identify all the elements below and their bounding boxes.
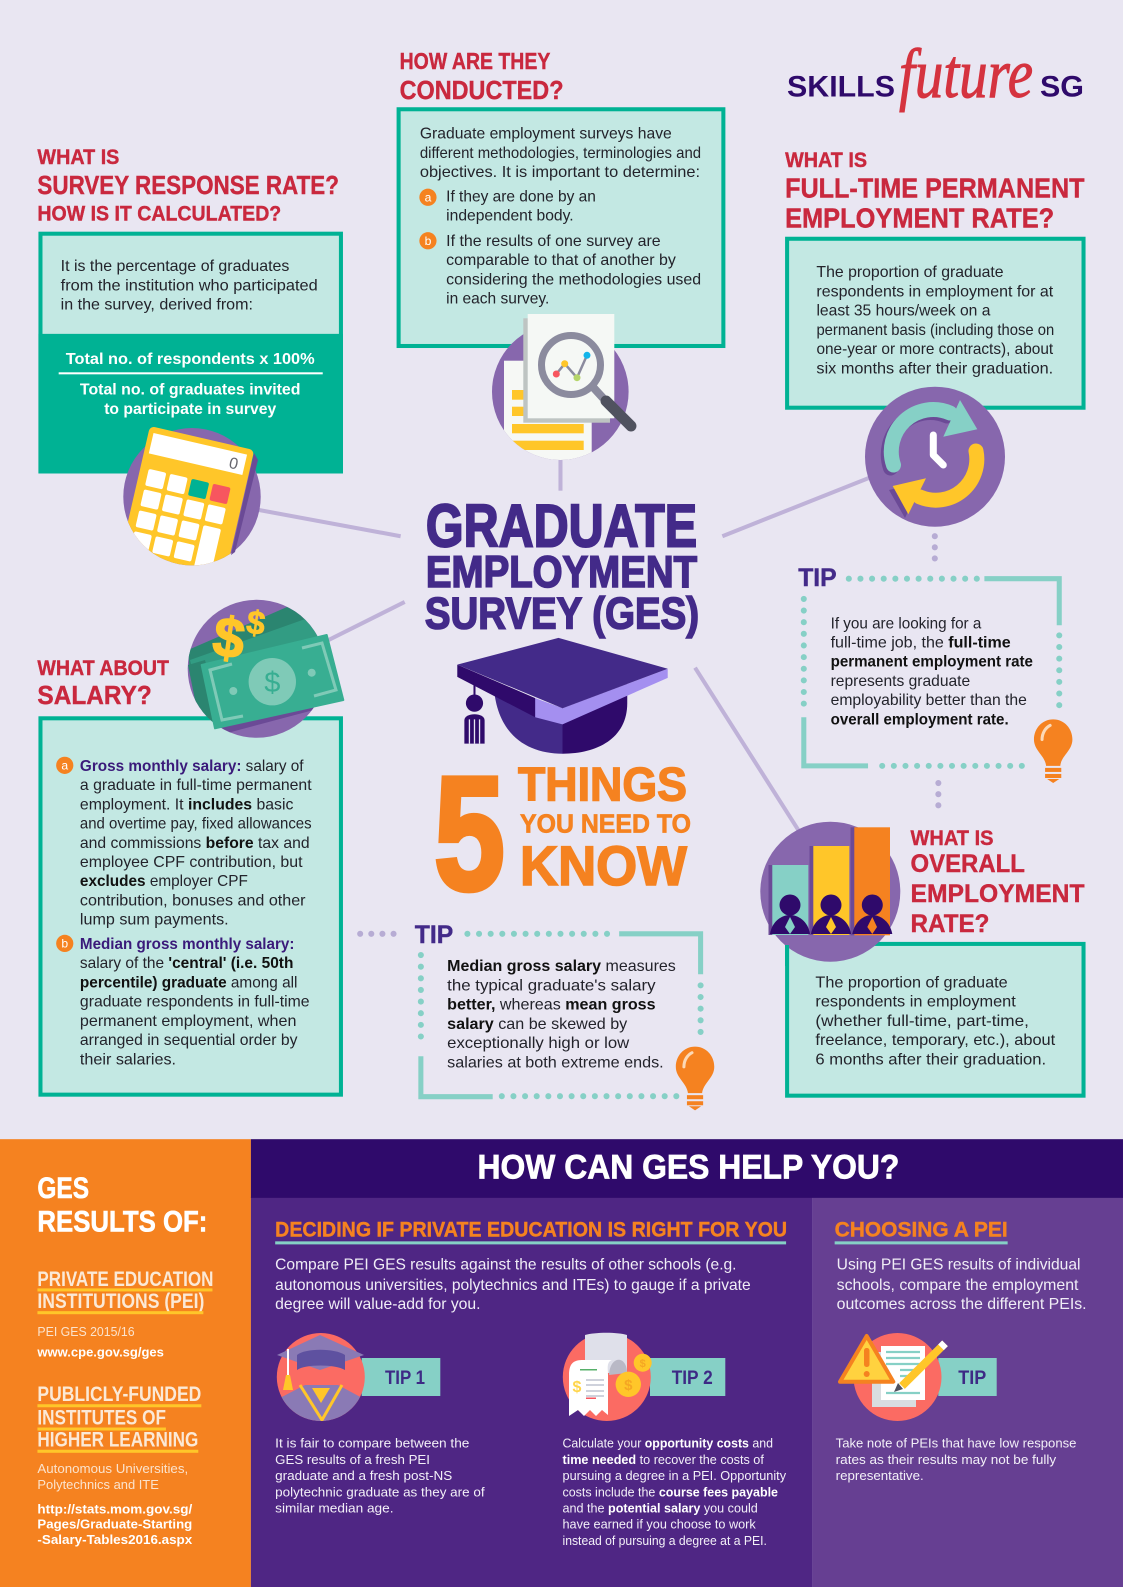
text: gross monthly salary: excludes employer CPF: [80, 873, 248, 890]
text: definition: [816, 264, 1054, 377]
text: gross monthly salary: a: [61, 758, 68, 772]
box background: [787, 944, 1084, 1096]
panel: tip on median salary: [360, 921, 714, 1110]
heading: overall employment rate: WHAT IS: [911, 826, 993, 850]
panel: tip on full-time job: [798, 536, 1072, 813]
publicly-funded institutes: Polytechnics and ITE: [37, 1477, 159, 1492]
tip text: employability better than the: [831, 692, 1027, 709]
private education institutions: www.cpe.gov.sg/ges: [36, 1345, 164, 1360]
private education institutions: PEI GES 2015/16: [37, 1324, 135, 1339]
text: definition: respondents in employment for at: [816, 283, 1054, 300]
text: gross monthly salary: a graduate in full-time permanent: [80, 777, 312, 794]
heading: how are they conducted: [400, 48, 564, 105]
box background: [787, 239, 1084, 408]
heading: GES results of: RESULTS OF:: [37, 1206, 207, 1239]
title: GRADUATE: [426, 491, 697, 559]
text: tip 2: time needed to recover the costs of: [563, 1452, 764, 1467]
text: gross monthly salary: and overtime pay, fixed allowances: [80, 816, 312, 833]
section: deciding if private education is right for you: degree will value-add for you.: [275, 1296, 481, 1313]
text: tip 2: [563, 1436, 786, 1548]
PEI tip badge with warning icon: [840, 1333, 997, 1421]
text: methodology: a: [425, 190, 432, 204]
tip text: full-time job, the full-time: [831, 634, 1011, 651]
section: deciding if private education is right for you: [275, 1217, 787, 1313]
icon: money: [188, 600, 343, 738]
panel: overall employment rate: [787, 826, 1085, 1096]
icon: calculator: 0: [227, 455, 240, 474]
5 things you need to know: THINGS: [518, 758, 687, 811]
text: definition: (whether full-time, part-time,: [815, 1013, 1029, 1030]
private education institutions: [36, 1267, 213, 1360]
text: tip 2: pursuing a degree in a PEI. Opportunity: [563, 1468, 786, 1483]
text: tip 1: [275, 1436, 485, 1515]
text: median gross monthly salary: graduate respondents in full-time: [80, 994, 310, 1011]
text: methodology: If the results of one survey are: [446, 233, 661, 250]
text: median gross monthly salary: salary of the 'central' (i.e. 50th: [80, 955, 293, 972]
text: PEI tip: [836, 1436, 1076, 1483]
text: methodology: considering the methodologies used: [446, 271, 701, 288]
text: tip 2: and the potential salary you could: [563, 1500, 758, 1515]
publicly-funded institutes: INSTITUTES OF: [37, 1405, 166, 1429]
formula: [59, 351, 323, 418]
tip 2 badge with receipt icon: $: [624, 1377, 633, 1394]
logo: SkillsFuture SG: [787, 36, 1084, 113]
title: SURVEY (GES): [425, 589, 699, 638]
text: gross monthly salary: Gross monthly salary: salary of: [80, 758, 304, 775]
tip text: better, whereas mean gross: [447, 997, 656, 1014]
green formula band: [38, 334, 343, 473]
text: methodology: independent body.: [446, 208, 574, 225]
section: deciding if private education is right for you: Compare PEI GES results against the results of other schools (e.g.: [275, 1257, 737, 1274]
text: median gross monthly salary: percentile) graduate among all: [80, 974, 297, 991]
text: tip 1: similar median age.: [275, 1500, 394, 1515]
heading: salary: [37, 656, 169, 710]
text: tip 1: GES results of a fresh PEI: [275, 1452, 430, 1467]
heading: GES results of: GES: [37, 1172, 89, 1205]
publicly-funded institutes: [37, 1382, 201, 1547]
text: definition: [815, 974, 1056, 1068]
text: methodology: b: [425, 234, 432, 248]
tip frame: [804, 579, 1059, 766]
text: definition: permanent basis (including those on: [816, 322, 1054, 339]
heading: how are they conducted: HOW ARE THEY: [400, 48, 551, 74]
tip label: TIP: [415, 921, 453, 949]
heading: full-time permanent: WHAT IS: [785, 148, 867, 172]
title: EMPLOYMENT: [426, 548, 697, 597]
icon: money: $: [209, 604, 249, 671]
panel: how are they conducted: [399, 48, 723, 346]
tip 1 badge with graduate icon: [276, 1333, 440, 1425]
logo: SkillsFuture SG: SKILLS: [787, 71, 895, 104]
tip 1 badge with graduate icon: TIP 1: [385, 1368, 425, 1389]
section: deciding if private education is right for you: DECIDING IF PRIVATE EDUCATION IS RIGHT FOR YOU: [275, 1217, 787, 1241]
text: methodology: in each survey.: [446, 291, 549, 308]
text: gross monthly salary: [56, 757, 312, 929]
tip 2 badge with receipt icon: [563, 1333, 725, 1421]
heading: salary: WHAT ABOUT: [37, 656, 169, 680]
text: definition: respondents in employment: [815, 994, 1016, 1011]
section: deciding if private education is right for you: autonomous universities, polytechnics and ITEs) to gauge if a private: [275, 1277, 751, 1294]
publicly-funded institutes: HIGHER LEARNING: [37, 1428, 198, 1452]
icon: graduation cap: [457, 638, 668, 754]
text: median gross monthly salary: [56, 935, 310, 1068]
publicly-funded institutes: -Salary-Tables2016.aspx: [37, 1532, 193, 1547]
heading: survey response rate: SURVEY RESPONSE RATE?: [37, 170, 339, 200]
tip text: represents graduate: [831, 673, 970, 690]
text: methodology: Graduate employment surveys have: [420, 126, 672, 143]
icon: money: $: [264, 667, 280, 699]
tip text: salary can be skewed by: [447, 1016, 627, 1033]
tip text: [831, 615, 1033, 728]
text: definition: least 35 hours/week on a: [816, 303, 991, 320]
icon: money: $: [244, 603, 268, 642]
publicly-funded institutes: Pages/Graduate-Starting: [37, 1517, 192, 1532]
text: methodology: comparable to that of another by: [446, 252, 676, 269]
connector lines: [253, 455, 875, 835]
heading: overall employment rate: [911, 826, 1085, 938]
heading: survey response rate: HOW IS IT CALCULATED?: [37, 202, 281, 226]
section: choosing a PEI: Using PEI GES results of individual: [837, 1257, 1080, 1274]
text: tip 2: have earned if you choose to work: [563, 1517, 756, 1532]
heading: how are they conducted: CONDUCTED?: [400, 75, 564, 105]
text: median gross monthly salary: Median gross monthly salary:: [80, 936, 294, 953]
text: definition: The proportion of graduate: [816, 264, 1004, 281]
section: choosing a PEI: outcomes across the different PEIs.: [837, 1296, 1087, 1313]
panel: salary: [37, 656, 341, 1095]
publicly-funded institutes: PUBLICLY-FUNDED: [37, 1382, 201, 1406]
text: PEI tip: rates as their results may not be fully: [836, 1452, 1057, 1467]
text: definition: six months after their graduation.: [816, 360, 1053, 377]
logo: SkillsFuture SG: SG: [1040, 71, 1084, 104]
box background: [40, 718, 341, 1095]
heading: full-time permanent: [785, 148, 1085, 234]
publicly-funded institutes: http://stats.mom.gov.sg/: [37, 1502, 193, 1517]
title: [425, 491, 699, 638]
text: gross monthly salary: contribution, bonuses and other: [80, 892, 306, 909]
heading: survey response rate: [37, 145, 339, 226]
panel: survey response rate: [37, 145, 343, 473]
private education institutions: INSTITUTIONS (PEI): [37, 1289, 204, 1313]
publicly-funded institutes: Autonomous Universities,: [37, 1461, 188, 1476]
panel: GES results of: [0, 1139, 251, 1587]
text: definition: from the institution who participated: [61, 277, 318, 294]
panel: how can GES help you: [251, 1139, 1123, 1587]
5 things you need to know: [434, 743, 691, 924]
text: gross monthly salary: employee CPF contribution, but: [80, 854, 303, 871]
icon: bar chart with people: [760, 822, 900, 966]
tip text: [447, 958, 676, 1071]
text: gross monthly salary: and commissions before tax and: [80, 835, 310, 852]
heading: GES results of: [37, 1172, 207, 1239]
text: tip 1: polytechnic graduate as they are of: [275, 1484, 485, 1499]
text: gross monthly salary: employment. It includes basic: [80, 796, 294, 813]
text: median gross monthly salary: b: [61, 936, 68, 950]
tip text: If you are looking for a: [831, 615, 982, 632]
heading: full-time permanent: FULL-TIME PERMANENT: [785, 172, 1085, 203]
heading: how can GES help you: HOW CAN GES HELP YOU?: [478, 1149, 899, 1187]
text: median gross monthly salary: permanent employment, when: [80, 1013, 296, 1030]
5 things you need to know: 5: [434, 743, 505, 924]
tip 2 badge with receipt icon: TIP 2: [672, 1368, 713, 1389]
orange background: [0, 1139, 251, 1587]
5 things you need to know: YOU NEED TO: [520, 809, 691, 839]
heading: full-time permanent: EMPLOYMENT RATE?: [785, 203, 1054, 234]
text: tip 1: It is fair to compare between the: [275, 1436, 469, 1451]
formula: to participate in survey: [104, 401, 276, 418]
text: definition: 6 months after their graduation.: [815, 1051, 1046, 1068]
panel: full-time permanent employment rate: [785, 148, 1085, 408]
heading: overall employment rate: EMPLOYMENT: [911, 880, 1085, 908]
icon: calculator: [123, 427, 261, 566]
text: definition: in the survey, derived from:: [61, 297, 253, 314]
heading: overall employment rate: RATE?: [911, 910, 989, 938]
text: definition: It is the percentage of graduates: [61, 258, 290, 275]
tip text: exceptionally high or low: [447, 1035, 630, 1052]
box background: [40, 234, 341, 471]
icon: light bulb: [1034, 719, 1072, 783]
box background: [399, 109, 723, 346]
heading: salary: SALARY?: [37, 680, 152, 710]
connector dots: [360, 931, 405, 937]
formula: Total no. of respondents x 100%: [66, 351, 315, 368]
section: choosing a PEI: CHOOSING A PEI: [835, 1217, 1008, 1241]
tip text: Median gross salary measures: [447, 958, 676, 975]
text: tip 2: instead of pursuing a degree at a PEI.: [563, 1533, 767, 1548]
5 things you need to know: KNOW: [520, 835, 687, 897]
section: choosing a PEI: schools, compare the employment: [837, 1277, 1079, 1294]
connector dots: [935, 536, 938, 813]
icon: documents and magnifier: [492, 314, 631, 461]
text: definition: [61, 258, 318, 314]
text: methodology: different methodologies, terminologies and: [420, 145, 701, 162]
tip frame: [421, 934, 701, 1097]
purple backgrounds: [251, 1139, 1123, 1587]
text: tip 2: Calculate your opportunity costs and: [563, 1436, 773, 1451]
tip 2 badge with receipt icon: $: [573, 1379, 582, 1396]
text: methodology: [419, 126, 701, 308]
text: gross monthly salary: lump sum payments.: [80, 912, 229, 929]
heading: survey response rate: WHAT IS: [37, 145, 119, 169]
text: definition: freelance, temporary, etc.), about: [815, 1032, 1056, 1049]
heading: overall employment rate: OVERALL: [911, 850, 1025, 878]
private education institutions: PRIVATE EDUCATION: [37, 1267, 213, 1291]
tip 2 badge with receipt icon: $: [640, 1358, 646, 1370]
icon: clock with arrows: [865, 387, 1005, 527]
tip text: overall employment rate.: [831, 711, 1009, 728]
text: definition: one-year or more contracts), about: [816, 341, 1054, 358]
section: choosing a PEI: [835, 1217, 1087, 1313]
text: definition: The proportion of graduate: [815, 974, 1008, 991]
tip text: salaries at both extreme ends.: [447, 1054, 664, 1071]
text: PEI tip: representative.: [836, 1468, 924, 1483]
text: median gross monthly salary: their salaries.: [80, 1051, 176, 1068]
text: methodology: objectives. It is important to determine:: [420, 164, 700, 181]
tip text: permanent employment rate: [831, 654, 1033, 671]
formula: Total no. of graduates invited: [80, 382, 300, 399]
tip text: the typical graduate's salary: [447, 977, 656, 994]
text: tip 1: graduate and a fresh post-NS: [275, 1468, 452, 1483]
text: methodology: If they are done by an: [446, 188, 596, 205]
text: median gross monthly salary: arranged in sequential order by: [80, 1032, 298, 1049]
PEI tip badge with warning icon: TIP: [958, 1368, 987, 1389]
icon: light bulb: [676, 1047, 714, 1110]
text: tip 2: costs include the course fees payable: [563, 1484, 778, 1499]
text: PEI tip: Take note of PEIs that have low response: [836, 1436, 1076, 1451]
logo: SkillsFuture SG: future: [899, 36, 1033, 113]
tip label: TIP: [798, 564, 837, 592]
